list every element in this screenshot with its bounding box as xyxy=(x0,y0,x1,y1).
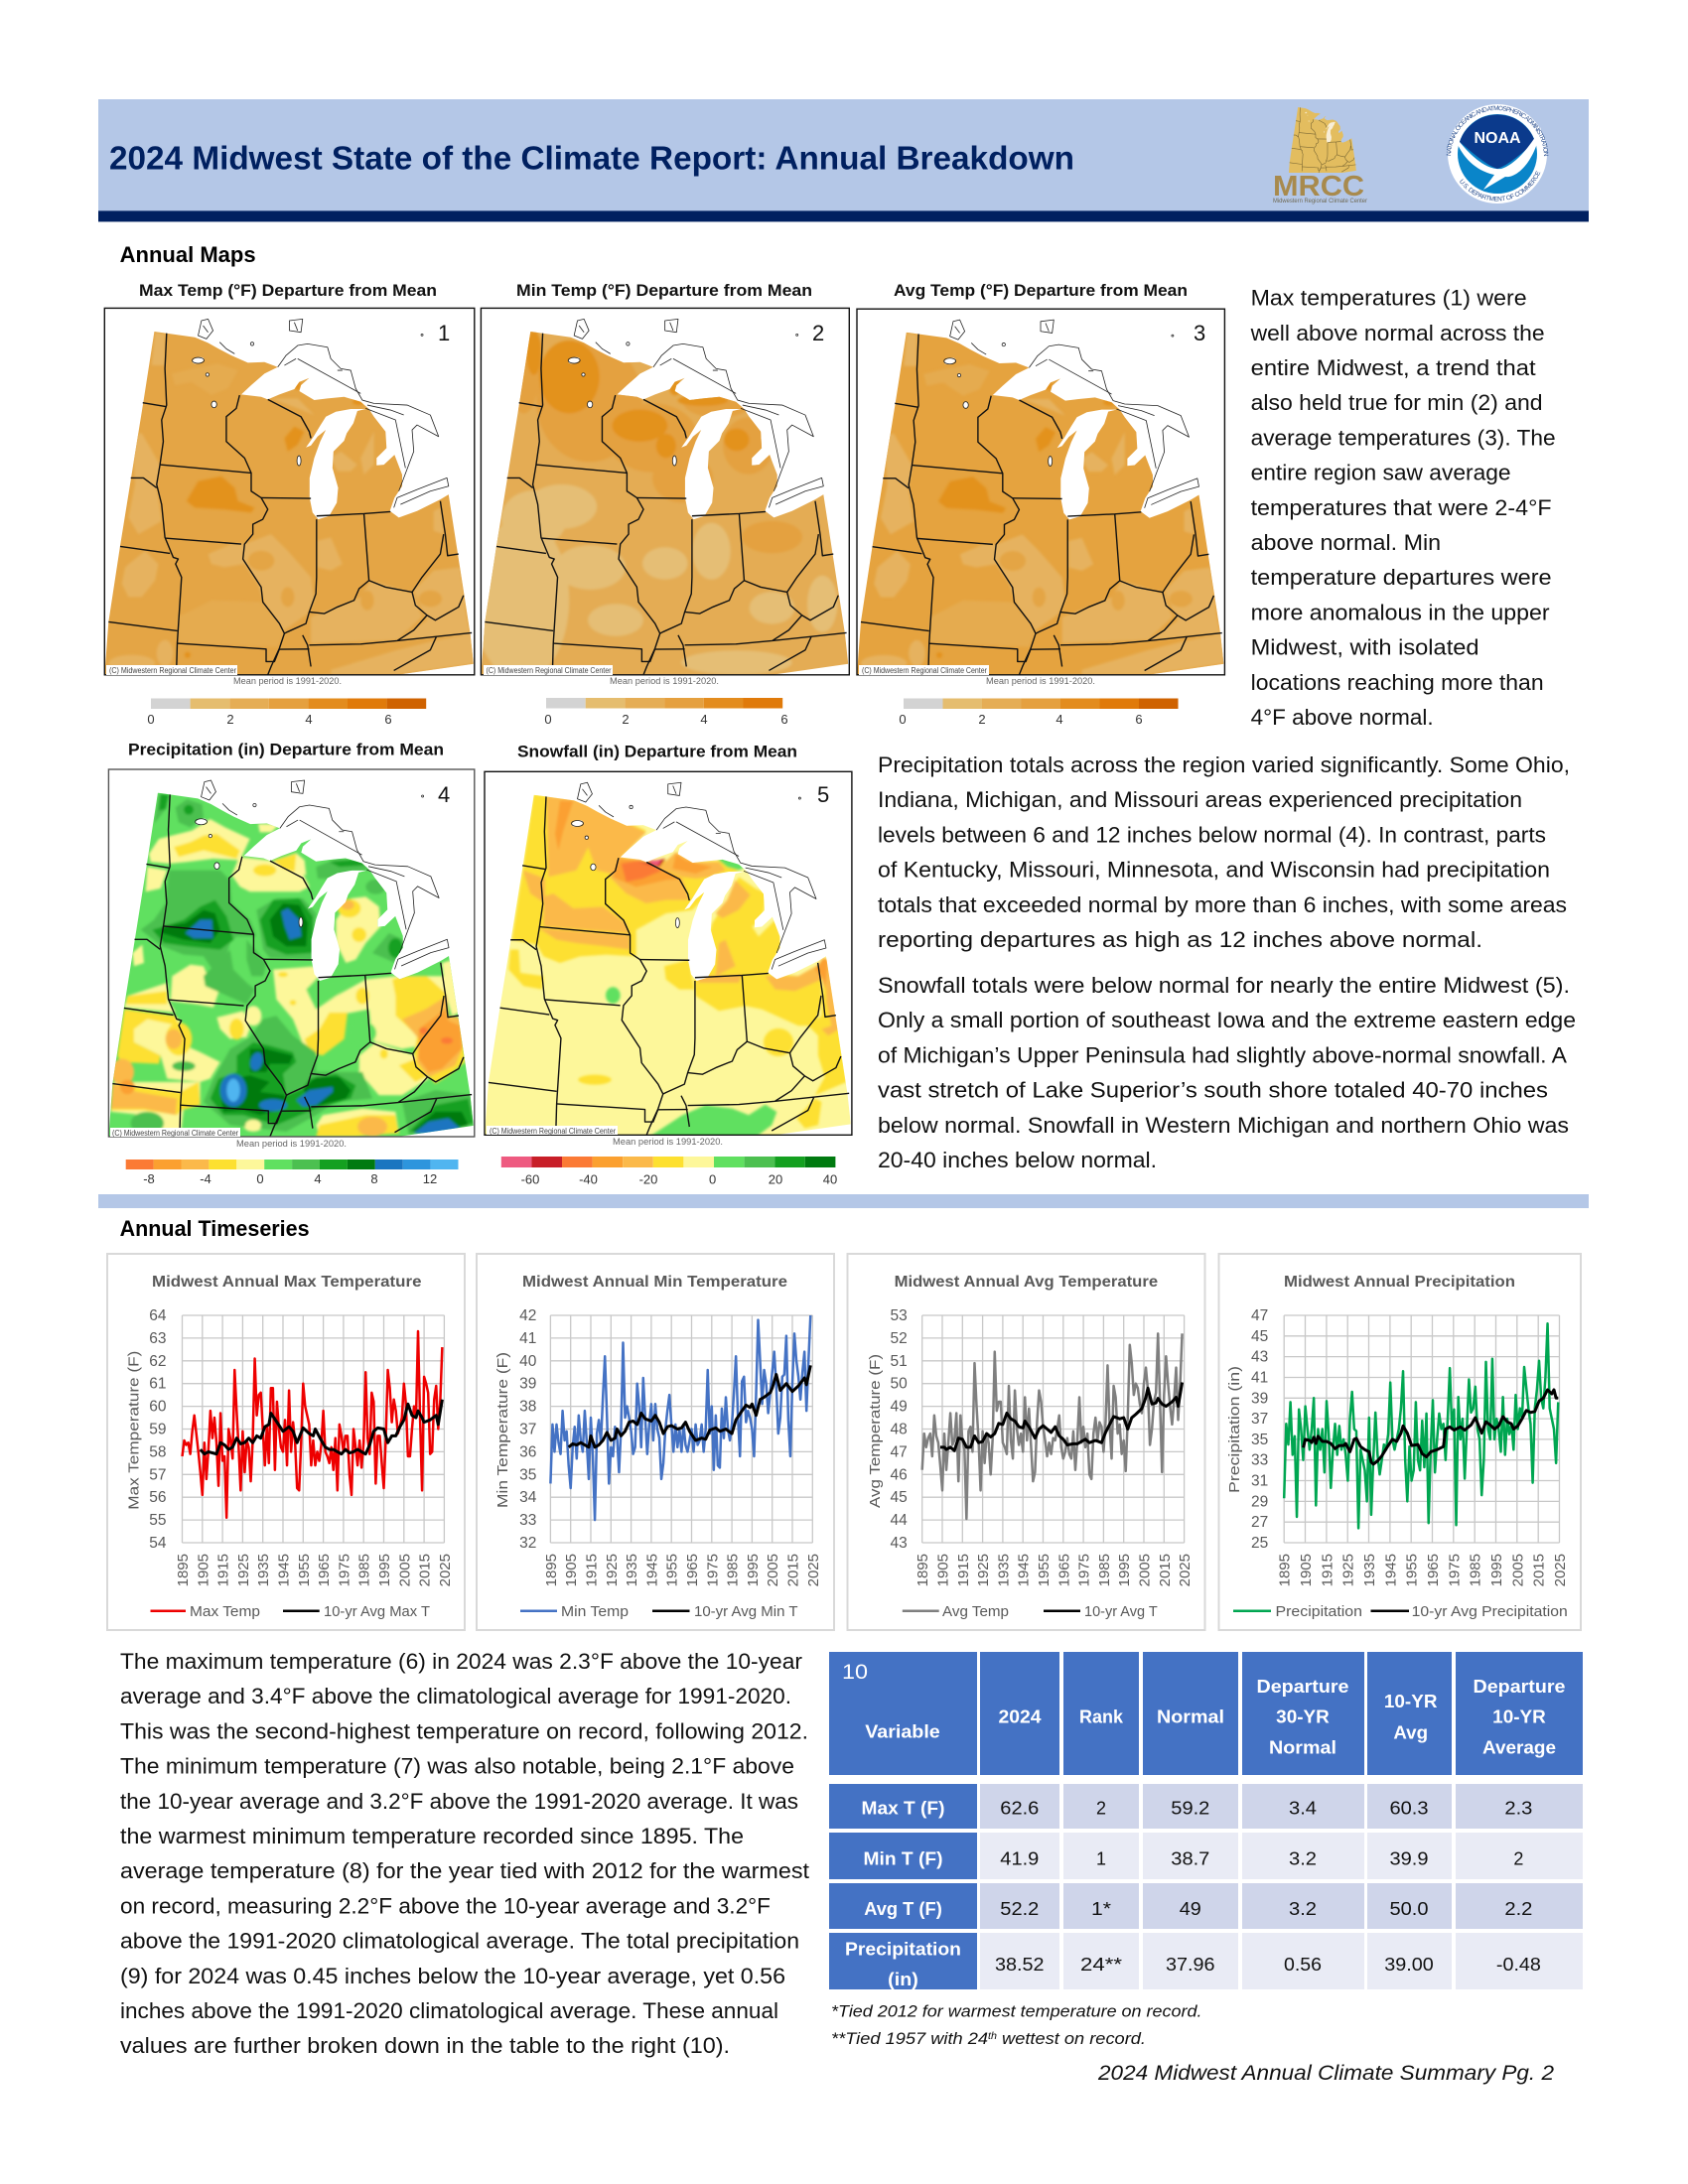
colorbar: precipitation: 12 xyxy=(423,1171,437,1186)
chart: average temperature: 50 xyxy=(890,1376,908,1393)
footnote: wettest tie: **Tied 1957 with 24 xyxy=(831,2029,977,2048)
chart: max temperature: 64 xyxy=(149,1307,167,1324)
map 5: snowfall departure xyxy=(479,771,861,1147)
chart: max temperature: 1955 xyxy=(296,1554,313,1586)
table header row: 2024 xyxy=(999,1706,1042,1727)
table header row xyxy=(829,1652,1583,1775)
colorbar: avg temp xyxy=(899,699,1178,727)
colorbar: avg temp: 4 xyxy=(1055,712,1063,727)
chart: min temperature: 42 xyxy=(519,1307,536,1324)
heading: annual maps: Annual Maps xyxy=(120,242,256,267)
chart: average temperature: 43 xyxy=(890,1535,908,1552)
chart: min temperature: 1975 xyxy=(704,1554,721,1586)
table row: avg T: 2.2 xyxy=(1504,1898,1532,1919)
chart: max temperature: 1905 xyxy=(195,1554,211,1586)
table row: max T: 2 xyxy=(1096,1797,1106,1818)
map title: precipitation: Precipitation (in) Departure from Mean xyxy=(128,742,444,759)
footnote: wettest tie: th xyxy=(988,2031,997,2042)
chart: average temperature: 1905 xyxy=(935,1554,952,1586)
chart: max temperature: 56 xyxy=(149,1489,167,1506)
table row: precipitation: 39.00 xyxy=(1384,1954,1434,1975)
chart: max temperature: 1895 xyxy=(175,1554,192,1586)
text block: snowfall summary: Only a small portion of southeast Iowa and the extreme eastern edge xyxy=(878,1008,1576,1032)
chart: precipitation: 45 xyxy=(1251,1328,1268,1345)
chart: max temperature: 55 xyxy=(149,1512,167,1529)
chart: precipitation: 41 xyxy=(1251,1370,1268,1386)
logo: NOAA xyxy=(1446,104,1549,204)
table row: precipitation: (in) xyxy=(888,1969,918,1989)
text block: temperature summary: Midwest, with isolated xyxy=(1251,635,1479,660)
chart: min temperature: 1915 xyxy=(584,1554,601,1586)
chart: precipitation: 1955 xyxy=(1404,1554,1421,1586)
text block: snowfall summary: vast stretch of Lake Superior’s south shore totaled 40-70 inches xyxy=(878,1078,1548,1103)
text block: precipitation summary: Precipitation totals across the region varied significantly. Some Ohio, xyxy=(878,752,1570,777)
chart: average temperature: 2025 xyxy=(1177,1554,1194,1586)
chart: max temperature: 59 xyxy=(149,1422,167,1437)
chart: max temperature: 2015 xyxy=(417,1554,434,1586)
chart: max temperature: 1935 xyxy=(255,1554,272,1586)
text block: snowfall summary: 20-40 inches below normal. xyxy=(878,1148,1157,1172)
chart: precipitation: 33 xyxy=(1251,1452,1268,1469)
text block: annual values summary: (9) for 2024 was 0.45 inches below the 10-year average, yet 0.56 xyxy=(120,1964,785,1988)
chart: precipitation: Precipitation (in) xyxy=(1226,1366,1243,1493)
chart: precipitation: Midwest Annual Precipitation xyxy=(1284,1274,1515,1291)
colorbar: max temp xyxy=(147,699,426,727)
chart: min temperature: 34 xyxy=(519,1489,537,1506)
panel number 2: 2 xyxy=(812,321,824,345)
chart: max temperature: Midwest Annual Max Temperature xyxy=(152,1274,422,1291)
chart: precipitation: 35 xyxy=(1251,1432,1268,1448)
chart: average temperature: 1965 xyxy=(1055,1554,1072,1586)
chart: average temperature: 1925 xyxy=(975,1554,992,1586)
colorbar: max temp: 2 xyxy=(226,712,234,727)
chart: min temperature: 2015 xyxy=(785,1554,802,1586)
map 3: avg temp departure: Mean period is 1991-2020. xyxy=(986,676,1095,686)
text block: temperature summary: above normal. Min xyxy=(1251,530,1441,555)
table header row: Normal xyxy=(1157,1706,1224,1727)
chart: precipitation: 43 xyxy=(1251,1349,1268,1366)
chart: precipitation: 1935 xyxy=(1361,1554,1378,1586)
table header row: Departure xyxy=(1257,1676,1348,1697)
map 5: snowfall departure: (C) Midwestern Regional Climate Center xyxy=(490,1127,616,1136)
map 1: max temp departure: (C) Midwestern Regional Climate Center xyxy=(109,666,236,675)
text block: temperature summary: well above normal across the xyxy=(1250,321,1545,345)
text block: snowfall summary: of Michigan’s Upper Peninsula had slightly above-normal snowfall. A xyxy=(878,1042,1567,1067)
text block: annual values summary: average and 3.4°F above the climatological average for 1991-2020. xyxy=(120,1684,791,1708)
chart: precipitation: 2015 xyxy=(1531,1554,1548,1586)
colorbar: avg temp: 0 xyxy=(899,712,907,727)
chart: average temperature: 2015 xyxy=(1157,1554,1174,1586)
colorbar: min temp: 6 xyxy=(780,712,788,727)
table header row: Avg xyxy=(1393,1722,1428,1743)
chart: min temperature: 1985 xyxy=(725,1554,742,1586)
chart: precipitation: 1945 xyxy=(1382,1554,1399,1586)
colorbar: min temp xyxy=(544,698,788,727)
text block: precipitation summary: of Kentucky, Missouri, Minnesota, and Wisconsin had precipitation xyxy=(878,858,1550,883)
colorbar: precipitation: -8 xyxy=(143,1171,155,1186)
colorbar: snowfall: -60 xyxy=(521,1172,539,1187)
colorbar: snowfall: 20 xyxy=(769,1172,782,1187)
text block: annual values summary: the warmest minimum temperature recorded since 1895. The xyxy=(120,1824,744,1848)
map 2: min temp departure xyxy=(474,308,858,686)
chart: max temperature: 1925 xyxy=(235,1554,252,1586)
text block: annual values summary: the 10-year average and 3.2°F above the 1991-2020 average. It was xyxy=(120,1789,798,1814)
chart: average temperature: 52 xyxy=(890,1330,908,1347)
chart: min temperature: 2005 xyxy=(765,1554,781,1586)
text block: precipitation summary xyxy=(878,752,1570,952)
chart: precipitation: 47 xyxy=(1251,1307,1268,1324)
table row: precipitation: Precipitation xyxy=(845,1938,961,1959)
table row: max T: 59.2 xyxy=(1171,1797,1209,1818)
map 1: max temp departure: Mean period is 1991-2020. xyxy=(233,676,342,686)
chart: max temperature: 1995 xyxy=(376,1554,393,1586)
map title: snowfall: Snowfall (in) Departure from Mean xyxy=(517,744,797,761)
table header row: 10-YR xyxy=(1384,1691,1437,1711)
text block: temperature summary: 4°F above normal. xyxy=(1251,705,1434,730)
map 4: precipitation departure: (C) Midwestern Regional Climate Center xyxy=(112,1129,238,1138)
logo: MRCC: MRCC xyxy=(1273,171,1364,203)
table row: avg T: 52.2 xyxy=(1000,1898,1039,1919)
chart: min temperature: 1945 xyxy=(643,1554,660,1586)
table: annual values xyxy=(829,1652,1583,1989)
text block: annual values summary xyxy=(120,1649,810,2058)
table row: avg T xyxy=(829,1883,1583,1929)
text block: temperature summary xyxy=(1250,286,1556,730)
table row: precipitation xyxy=(829,1933,1583,1989)
text block: snowfall summary: Snowfall totals were below normal for nearly the entire Midwest (5). xyxy=(878,973,1570,998)
chart: max temperature: 62 xyxy=(149,1353,167,1370)
chart: max temperature: 63 xyxy=(149,1330,167,1347)
chart: average temperature: Midwest Annual Avg Temperature xyxy=(895,1274,1159,1291)
map title: max temp: Max Temp (°F) Departure from Mean xyxy=(139,282,437,300)
colorbar: min temp: 4 xyxy=(700,712,708,727)
colorbar: snowfall: 0 xyxy=(709,1172,716,1187)
map title: avg temp: Avg Temp (°F) Departure from Mean xyxy=(894,282,1188,300)
chart: max temperature: 2005 xyxy=(396,1554,413,1586)
chart: max temperature: Max Temperature (F) xyxy=(125,1351,143,1510)
colorbar: min temp: 0 xyxy=(544,712,552,727)
table row: precipitation: 38.52 xyxy=(995,1954,1045,1975)
text block: temperature summary: more anomalous in the upper xyxy=(1251,600,1550,624)
chart: precipitation: 31 xyxy=(1251,1473,1268,1489)
chart: min temperature: 41 xyxy=(519,1330,536,1347)
chart: precipitation: 1905 xyxy=(1298,1554,1315,1586)
table row: avg T: 49 xyxy=(1180,1898,1201,1919)
chart: precipitation: 29 xyxy=(1251,1493,1268,1510)
chart: precipitation: 1995 xyxy=(1488,1554,1505,1586)
text block: temperature summary: entire Midwest, a trend that xyxy=(1251,355,1536,380)
chart: average temperature: 1955 xyxy=(1036,1554,1053,1586)
text block: snowfall summary xyxy=(878,973,1576,1172)
chart: min temperature: 1905 xyxy=(563,1554,580,1586)
chart: min temperature: Min Temperature (F) xyxy=(494,1352,511,1508)
chart: min temperature: 40 xyxy=(519,1353,537,1370)
chart: precipitation: 1915 xyxy=(1319,1554,1336,1586)
table row: precipitation: 0.56 xyxy=(1284,1954,1322,1975)
chart: average temperature: 45 xyxy=(890,1489,908,1506)
chart: average temperature: 44 xyxy=(890,1512,908,1529)
chart: max temperature: 1965 xyxy=(316,1554,333,1586)
table row: min T: 41.9 xyxy=(1000,1847,1039,1868)
chart: min temperature: 33 xyxy=(519,1512,536,1529)
chart: average temperature: 49 xyxy=(890,1399,908,1416)
colorbar: max temp: 6 xyxy=(384,712,392,727)
chart: average temperature: 46 xyxy=(890,1466,908,1483)
chart: min temperature: 38 xyxy=(519,1399,536,1416)
map 1: max temp departure xyxy=(98,308,484,686)
map 4: precipitation departure: Mean period is 1991-2020. xyxy=(236,1139,347,1149)
chart: max temperature xyxy=(107,1254,465,1630)
chart: max temperature: 1985 xyxy=(356,1554,373,1586)
chart: min temperature: 1925 xyxy=(604,1554,621,1586)
panel number 4: 4 xyxy=(438,782,450,807)
chart: precipitation xyxy=(1219,1254,1581,1630)
chart: precipitation: 2025 xyxy=(1552,1554,1569,1586)
table header row: Normal xyxy=(1269,1737,1336,1758)
text block: temperature summary: entire region saw average xyxy=(1251,461,1511,485)
colorbar: snowfall: -40 xyxy=(579,1172,598,1187)
chart: average temperature: 10-yr Avg T xyxy=(1084,1604,1158,1620)
map title: min temp: Min Temp (°F) Departure from Mean xyxy=(516,282,812,300)
chart: max temperature: 58 xyxy=(149,1443,167,1460)
chart: min temperature: 1955 xyxy=(664,1554,681,1586)
text block: annual values summary: above the 1991-2020 climatological average. The total precipitation xyxy=(120,1929,799,1954)
text block: annual values summary: values are further broken down in the table to the right (10). xyxy=(120,2033,730,2058)
table row: avg T: 3.2 xyxy=(1289,1898,1317,1919)
text block: snowfall summary: below normal. Snowfall in Western Michigan and northern Ohio was xyxy=(878,1113,1569,1138)
table row: avg T: 1* xyxy=(1091,1898,1111,1919)
logo: MRCC: Midwestern Regional Climate Center xyxy=(1273,198,1368,205)
chart: min temperature xyxy=(477,1254,834,1630)
table row: max T: 2.3 xyxy=(1504,1797,1532,1818)
title: 2024 Midwest State of the Climate Report: Annual Breakdown xyxy=(109,140,1074,177)
table row: min T: 1 xyxy=(1096,1847,1106,1868)
map 2: min temp departure: (C) Midwestern Regional Climate Center xyxy=(487,666,612,675)
chart: max temperature: 61 xyxy=(149,1376,167,1393)
chart: precipitation: 1965 xyxy=(1425,1554,1442,1586)
chart: max temperature: 1945 xyxy=(276,1554,292,1586)
logo: NOAA: NATIONAL OCEANIC AND ATMOSPHERIC ADMINISTRATION xyxy=(1446,105,1549,157)
chart: min temperature: 36 xyxy=(519,1443,536,1460)
chart: average temperature: 1995 xyxy=(1116,1554,1133,1586)
table header row: Variable xyxy=(865,1721,940,1742)
table header row: 30-YR xyxy=(1276,1706,1330,1727)
table row: min T: 38.7 xyxy=(1171,1847,1209,1868)
chart: max temperature: 10-yr Avg Max T xyxy=(324,1604,430,1620)
colorbar: precipitation: 4 xyxy=(314,1171,322,1186)
colorbar: precipitation: 8 xyxy=(370,1171,378,1186)
text block: temperature summary: Max temperatures (1) were xyxy=(1251,286,1527,311)
table row: precipitation: 24** xyxy=(1080,1954,1122,1975)
colorbar: max temp: 0 xyxy=(147,712,155,727)
chart: average temperature: 1985 xyxy=(1096,1554,1113,1586)
logo: MRCC xyxy=(1273,107,1368,205)
text block: precipitation summary: reporting departures as high as 12 inches above normal. xyxy=(878,927,1482,952)
colorbar: snowfall xyxy=(501,1157,837,1187)
table row: max T xyxy=(829,1784,1583,1829)
table row: max T: 3.4 xyxy=(1289,1797,1317,1818)
chart: min temperature: 39 xyxy=(519,1376,536,1393)
colorbar: precipitation: 0 xyxy=(256,1171,264,1186)
chart: average temperature: 51 xyxy=(890,1353,908,1370)
colorbar: snowfall: 40 xyxy=(823,1172,837,1187)
text block: annual values summary: The maximum temperature (6) in 2024 was 2.3°F above the 10-year xyxy=(120,1649,803,1674)
chart: min temperature: 1895 xyxy=(543,1554,560,1586)
table header row: 10-YR xyxy=(1492,1706,1546,1727)
logo: NOAA: U.S. DEPARTMENT OF COMMERCE xyxy=(1460,171,1541,201)
chart: precipitation: 25 xyxy=(1251,1535,1268,1552)
colorbar: avg temp: 2 xyxy=(978,712,986,727)
chart: average temperature: 53 xyxy=(890,1307,908,1324)
map 5: snowfall departure: Mean period is 1991-2020. xyxy=(613,1137,723,1147)
chart: average temperature: 1975 xyxy=(1076,1554,1093,1586)
table row: min T: 39.9 xyxy=(1390,1847,1428,1868)
table row: min T: 3.2 xyxy=(1289,1847,1317,1868)
panel number 1: 1 xyxy=(438,321,450,345)
text block: temperature summary: average temperatures (3). The xyxy=(1251,425,1556,450)
colorbar: snowfall: -20 xyxy=(639,1172,657,1187)
logo: NOAA: NOAA xyxy=(1474,130,1521,147)
chart: average temperature: 1895 xyxy=(914,1554,931,1586)
map 3: avg temp departure: (C) Midwestern Regional Climate Center xyxy=(862,666,987,675)
chart: average temperature: 1935 xyxy=(995,1554,1012,1586)
text block: annual values summary: The minimum temperature (7) was also notable, being 2.1°F above xyxy=(120,1754,794,1779)
chart: min temperature: 35 xyxy=(519,1466,536,1483)
table row: min T xyxy=(829,1833,1583,1879)
chart: min temperature: 1935 xyxy=(624,1554,640,1586)
text block: annual values summary: average temperature (8) for the year tied with 2012 for the warmest xyxy=(120,1858,810,1883)
chart: max temperature: 1915 xyxy=(215,1554,232,1586)
chart: max temperature: 1975 xyxy=(336,1554,352,1586)
chart: precipitation: 37 xyxy=(1251,1411,1268,1428)
text block: precipitation summary: totals that exceeded normal by more than 6 inches, with some areas xyxy=(878,892,1567,917)
chart: average temperature: 2005 xyxy=(1137,1554,1154,1586)
chart: precipitation: 10-yr Avg Precipitation xyxy=(1412,1604,1568,1620)
chart: precipitation: 2005 xyxy=(1509,1554,1526,1586)
chart: max temperature: 54 xyxy=(149,1535,167,1552)
chart: max temperature: 57 xyxy=(149,1466,167,1483)
table row: max T: 62.6 xyxy=(1000,1797,1039,1818)
chart: min temperature: 37 xyxy=(519,1422,536,1437)
chart: min temperature: Min Temp xyxy=(561,1604,629,1620)
chart: precipitation: 1975 xyxy=(1446,1554,1463,1586)
colorbar: avg temp: 6 xyxy=(1135,712,1143,727)
chart: precipitation: 1985 xyxy=(1468,1554,1484,1586)
table header row: Rank xyxy=(1079,1706,1124,1727)
footer: page label: 2024 Midwest Annual Climate Summary Pg. 2 xyxy=(1097,2062,1554,2085)
chart: average temperature: 1945 xyxy=(1016,1554,1033,1586)
chart: average temperature: Avg Temp xyxy=(942,1604,1009,1620)
table row: avg T: 50.0 xyxy=(1390,1898,1428,1919)
chart: precipitation: 1895 xyxy=(1277,1554,1294,1586)
chart: average temperature xyxy=(848,1254,1205,1630)
chart: precipitation: 1925 xyxy=(1340,1554,1357,1586)
table header row: 10 xyxy=(842,1661,868,1684)
text block: annual values summary: This was the second-highest temperature on record, following 2012. xyxy=(120,1718,808,1743)
colorbar: min temp: 2 xyxy=(622,712,630,727)
text block: temperature summary: temperature departures were xyxy=(1251,565,1552,590)
text block: annual values summary: on record, measuring 2.2°F above the 10-year average and 3.2°F xyxy=(120,1893,771,1918)
chart: min temperature: 10-yr Avg Min T xyxy=(694,1604,798,1620)
footnote: warmest tie: *Tied 2012 for warmest temperature on record. xyxy=(831,2002,1201,2021)
colorbar: precipitation xyxy=(126,1160,458,1186)
table row: precipitation: 37.96 xyxy=(1166,1954,1215,1975)
chart: max temperature: 2025 xyxy=(437,1554,454,1586)
chart: average temperature: Avg Temperature (F) xyxy=(867,1354,884,1508)
chart: min temperature: Midwest Annual Min Temperature xyxy=(522,1274,787,1291)
chart: min temperature: 32 xyxy=(519,1535,536,1552)
heading: annual timeseries: Annual Timeseries xyxy=(120,1216,310,1241)
panel number 3: 3 xyxy=(1194,321,1205,345)
colorbar: precipitation: -4 xyxy=(200,1171,211,1186)
text block: temperature summary: locations reaching more than xyxy=(1251,670,1544,695)
table row: avg T: Avg T (F) xyxy=(864,1898,942,1919)
text block: temperature summary: temperatures that were 2-4°F xyxy=(1251,495,1552,520)
chart: precipitation: 27 xyxy=(1251,1514,1268,1531)
section divider strip xyxy=(98,1194,1589,1208)
chart: min temperature: 2025 xyxy=(805,1554,822,1586)
chart: average temperature: 47 xyxy=(890,1443,908,1460)
chart: min temperature: 1965 xyxy=(684,1554,701,1586)
text block: annual values summary: inches above the 1991-2020 climatological average. These annual xyxy=(120,1998,778,2023)
table row: max T: Max T (F) xyxy=(862,1797,945,1818)
panel number 5: 5 xyxy=(817,782,829,807)
chart: average temperature: 1915 xyxy=(955,1554,972,1586)
map 2: min temp departure: Mean period is 1991-2020. xyxy=(610,676,719,686)
table row: min T: 2 xyxy=(1513,1847,1523,1868)
table header row: Departure xyxy=(1474,1676,1565,1697)
text block: precipitation summary: Indiana, Michigan, and Missouri areas experienced precipitation xyxy=(878,787,1522,812)
table header row: Average xyxy=(1482,1737,1556,1758)
map 4: precipitation departure xyxy=(102,769,484,1149)
chart: average temperature: 48 xyxy=(890,1422,908,1437)
footnote: wettest tie: wettest on record. xyxy=(997,2029,1146,2048)
colorbar: max temp: 4 xyxy=(305,712,313,727)
map 3: avg temp departure xyxy=(851,309,1233,686)
chart: precipitation: Precipitation xyxy=(1275,1604,1362,1620)
chart: max temperature: 60 xyxy=(149,1399,167,1416)
chart: max temperature: Max Temp xyxy=(190,1604,260,1620)
table row: precipitation: -0.48 xyxy=(1496,1954,1541,1975)
table row: min T: Min T (F) xyxy=(864,1847,943,1868)
text block: temperature summary: also held true for min (2) and xyxy=(1251,390,1543,415)
header banner xyxy=(98,99,1589,222)
table row: max T: 60.3 xyxy=(1390,1797,1428,1818)
chart: min temperature: 1995 xyxy=(745,1554,762,1586)
chart: precipitation: 39 xyxy=(1251,1390,1268,1407)
text block: precipitation summary: levels between 6 and 12 inches below normal (4). In contrast, parts xyxy=(878,822,1546,847)
